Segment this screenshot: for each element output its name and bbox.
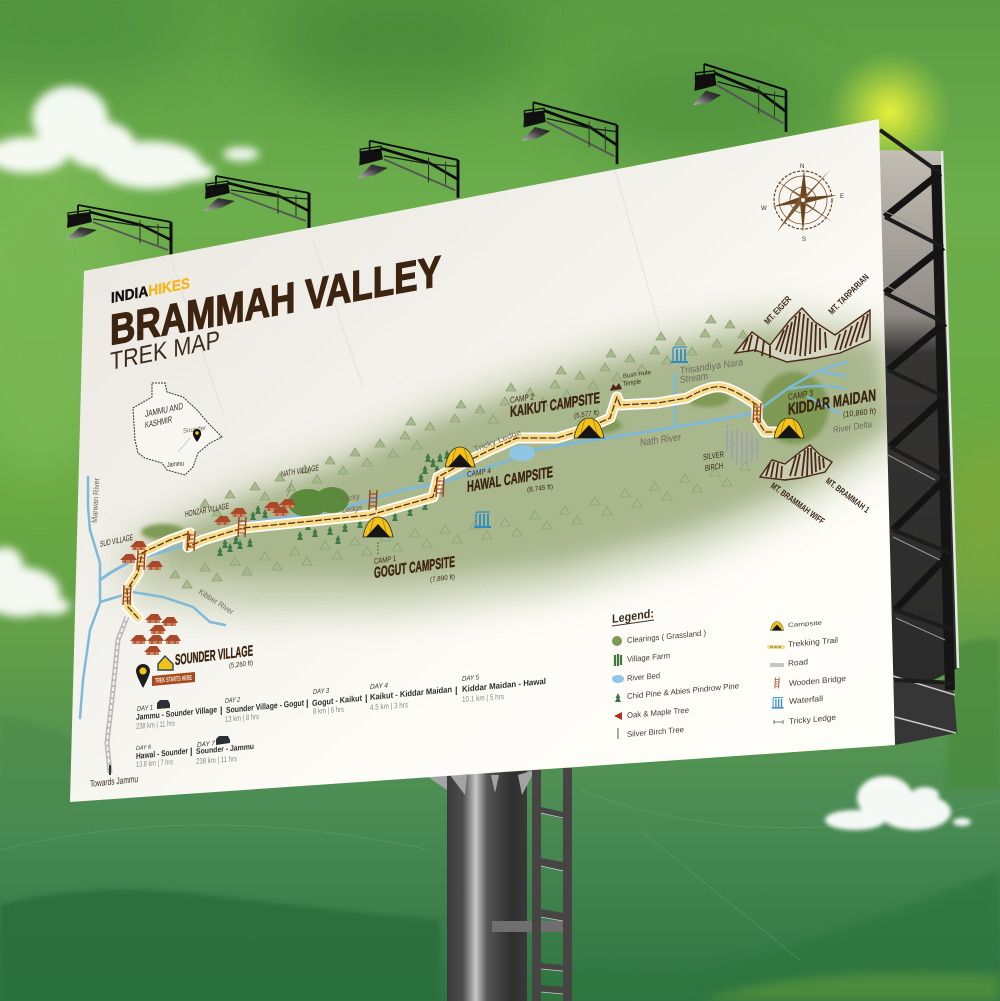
itinerary: day 2: | xyxy=(306,698,309,708)
itinerary: day 4: 4.5 km | 3 hrs xyxy=(370,700,408,712)
legend: Village Farm xyxy=(627,651,670,664)
map wash: green terrain xyxy=(125,315,900,610)
compass rose: S xyxy=(802,237,806,243)
legend: Waterfall xyxy=(789,694,823,706)
camp 3 label: CAMP 3 xyxy=(788,388,813,402)
village and place labels: Marwan River xyxy=(90,477,101,523)
locator map: Jammu and Kashmir: Sounder xyxy=(183,425,207,435)
itinerary: day 1: | xyxy=(220,705,223,715)
village and place labels: Nath River xyxy=(640,431,681,449)
mountains: Mt Eiger and Mt Tarparian xyxy=(735,308,870,362)
compass rose: W xyxy=(761,206,767,212)
itinerary: day 1: DAY 1 xyxy=(137,705,153,713)
floodlight 3 xyxy=(357,141,458,198)
logo: Indiahikes: INDIAHIKES xyxy=(111,275,190,307)
village and place labels xyxy=(90,272,873,617)
campsite tents xyxy=(363,418,804,537)
start point: Sounder Village: (5,260 ft) xyxy=(229,660,253,670)
itinerary: day 2: Sounder Village - Gogut xyxy=(226,697,304,715)
village and place labels: SILVER xyxy=(703,449,724,462)
river delta branches xyxy=(765,362,847,413)
village and place labels: Kibber River xyxy=(197,587,236,617)
start point: Sounder Village: SOUNDER VILLAGE xyxy=(175,642,253,669)
compass rose xyxy=(761,164,844,243)
cloud: bottom right xyxy=(825,776,971,830)
itinerary: day 1 xyxy=(136,700,223,731)
camp 1 label xyxy=(374,542,455,584)
mini mountains xyxy=(170,315,750,588)
billboard map panel xyxy=(70,119,900,802)
marwan river xyxy=(80,477,100,718)
wooden bridges xyxy=(123,403,761,605)
village and place labels: HONZAR VILLAGE xyxy=(185,500,229,519)
itinerary: day 2 xyxy=(225,697,309,724)
floodlight 2 xyxy=(203,176,309,228)
itinerary: day 6: DAY 6 xyxy=(136,745,152,752)
village and place labels: MT. BRAMMAH WIFF xyxy=(769,481,827,526)
itinerary: day 3 xyxy=(312,688,368,716)
camp 1 label: (7,890 ft) xyxy=(430,574,455,584)
itinerary: day 4: DAY 4 xyxy=(370,682,388,691)
camp 3 label: KIDDAR MAIDAN xyxy=(788,385,876,419)
itinerary: day 4: Kaikut - Kiddar Maidan xyxy=(370,684,452,702)
camp 3 label: (10,860 ft) xyxy=(843,407,876,419)
itinerary: day 6: Hawal - Sounder xyxy=(136,746,189,761)
camp 2 label xyxy=(510,390,600,421)
camp 2 label: KAIKUT CAMPSITE xyxy=(510,390,600,421)
start point: Sounder Village xyxy=(136,642,253,688)
itinerary: day 6: 13.8 km | 7 hrs xyxy=(136,757,173,769)
silver birch grove xyxy=(727,425,757,467)
village and place labels: Ledge xyxy=(342,503,362,515)
itinerary: day 2: DAY 2 xyxy=(225,697,240,705)
village and place labels: MT. BRAMMAH 1 xyxy=(824,476,871,515)
itinerary: day 6 xyxy=(136,745,193,769)
legend: Silver Birch Tree xyxy=(627,725,685,739)
itinerary: day 3: | xyxy=(365,693,368,703)
camp 2 label: (5,577 ft) xyxy=(574,410,599,420)
camp 3 label xyxy=(788,385,876,419)
legend: Trekking Trail xyxy=(788,636,838,649)
farm fields xyxy=(288,487,349,517)
billboard back frame and truss xyxy=(878,130,958,745)
camp 2 label: CAMP 2 xyxy=(510,391,534,405)
kibber river xyxy=(100,592,225,625)
legend: Oak & Maple Tree xyxy=(627,706,690,720)
rivers xyxy=(80,362,847,718)
legend: Chid Pine & Abies Pindrow Pine xyxy=(627,681,740,701)
waterfalls xyxy=(474,347,688,527)
locator map: Jammu and Kashmir: JAMMU AND xyxy=(145,401,183,419)
legend: Campsite xyxy=(788,621,823,629)
legend: Wooden Bridge xyxy=(789,674,847,688)
village and place labels: SUD VILLAGE xyxy=(100,532,133,549)
camp 4 label: HAWAL CAMPSITE xyxy=(467,464,553,496)
kiddar maidan clearing xyxy=(759,372,829,444)
village and place labels: Temple xyxy=(623,378,641,388)
cloud: middle left xyxy=(0,547,70,617)
clearing patches xyxy=(141,389,730,540)
mountains: Mt Brammah group xyxy=(760,445,832,480)
village and place labels: BIRCH xyxy=(705,461,723,473)
legend: Legend: xyxy=(612,606,654,626)
locator map: Jammu and Kashmir xyxy=(133,383,222,475)
camp 1 label: CAMP 1 xyxy=(374,554,396,566)
village huts xyxy=(120,499,296,655)
legend xyxy=(612,606,847,739)
itinerary: day 3: DAY 3 xyxy=(313,688,329,696)
tributary stream xyxy=(674,373,676,427)
river bed lake xyxy=(509,445,535,461)
pine forests xyxy=(217,450,450,556)
itinerary: day 1: 238 km | 11 hrs xyxy=(136,719,175,731)
camp 1 label: GOGUT CAMPSITE xyxy=(374,554,455,582)
legend: Tricky Ledge xyxy=(789,713,837,726)
subtitle: TREK MAP xyxy=(110,326,220,376)
itinerary: day 3: 8 km | 6 hrs xyxy=(313,705,344,716)
itinerary: day 2: 13 km | 8 hrs xyxy=(225,712,259,724)
village and place labels: MT. TARPARIAN xyxy=(826,272,871,316)
camp 4 label xyxy=(467,464,553,496)
floodlight 4 xyxy=(522,102,617,164)
itinerary: day 4 xyxy=(370,682,458,712)
camp 4 label: CAMP 4 xyxy=(467,466,491,479)
itinerary: day 7: DAY 7 xyxy=(197,740,216,749)
village and place labels: Bush Hute xyxy=(623,370,652,380)
nath river xyxy=(100,407,763,580)
village and place labels: NATH VILLAGE xyxy=(281,462,319,479)
floodlight 1 xyxy=(65,205,171,257)
start point: Sounder Village: TREK STARTS HERE xyxy=(155,675,192,685)
itinerary: day 1: Jammu - Sounder Village xyxy=(136,704,217,722)
itinerary: day 6: | xyxy=(190,746,193,756)
village and place labels: Tricky xyxy=(340,492,360,504)
legend: River Bed xyxy=(627,671,660,683)
village and place labels: Tricky Ledge xyxy=(472,427,523,454)
cloud: top left xyxy=(0,86,259,189)
itinerary: day 7: 238 km | 11 hrs xyxy=(196,754,237,766)
village and place labels: MT. EIGER xyxy=(762,294,794,326)
road to Jammu xyxy=(107,617,127,775)
village and place labels: Trisandiya Nara xyxy=(680,357,743,377)
compass rose: E xyxy=(840,194,844,200)
itinerary: day 5: Kiddar Maidan - Hawal xyxy=(462,676,546,694)
floodlight 5 xyxy=(693,63,786,132)
village and place labels: Stream xyxy=(680,371,708,386)
towards Jammu label: Towards Jammu xyxy=(90,774,138,790)
legend: Clearings ( Grassland ) xyxy=(627,628,706,645)
itinerary: day 5 xyxy=(462,675,546,704)
itinerary: day 5: DAY 5 xyxy=(462,675,479,683)
itinerary: day 5: 10.1 km | 5 hrs xyxy=(462,692,504,704)
locator map: Jammu and Kashmir: KASHMIR xyxy=(145,414,172,430)
trekking trail xyxy=(127,387,783,618)
pole xyxy=(425,765,567,1001)
itinerary: day 7: Sounder - Jammu xyxy=(196,742,254,756)
locator map: Jammu and Kashmir: Jammu xyxy=(167,461,184,469)
itinerary: day 4: | xyxy=(455,685,458,695)
village and place labels: River Delta xyxy=(833,419,873,435)
camp 4 label: (8,745 ft) xyxy=(527,484,553,494)
itinerary: day 7 xyxy=(196,736,254,766)
itinerary: day 3: Gogut - Kaikut xyxy=(312,693,362,708)
title: BRAMMAH VALLEY xyxy=(110,248,441,355)
legend: Road xyxy=(788,657,808,668)
compass rose: N xyxy=(800,164,804,170)
yellow glow behind billboard corner xyxy=(828,50,952,174)
ladder xyxy=(532,768,572,1001)
